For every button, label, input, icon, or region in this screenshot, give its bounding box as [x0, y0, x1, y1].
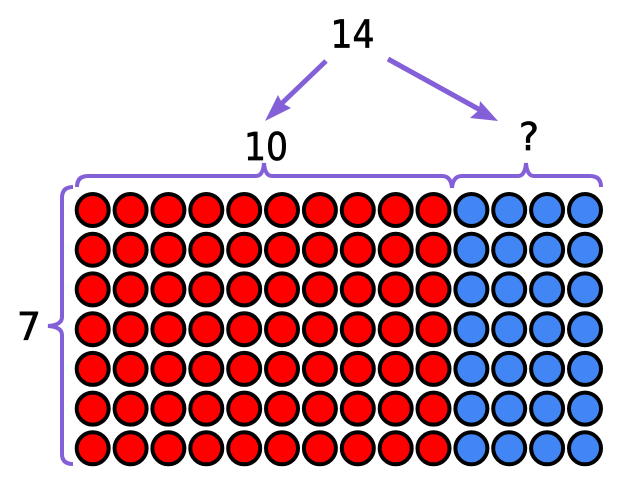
brace: top over four blue columns — [452, 163, 601, 188]
label: 10: 10 — [244, 125, 288, 169]
arrow: 14 to 10 — [265, 61, 326, 121]
arrow: 14 to unknown — [388, 59, 498, 121]
dot array: red 7 by 10 — [77, 194, 449, 464]
label: unknown: ? — [519, 115, 539, 159]
brace: left side over seven rows — [48, 187, 73, 464]
brace: top over ten red columns — [77, 163, 452, 188]
label: 7: 7 — [17, 305, 41, 349]
dot array: blue 7 by 4 — [455, 194, 601, 464]
label: 14: 14 — [330, 12, 374, 56]
